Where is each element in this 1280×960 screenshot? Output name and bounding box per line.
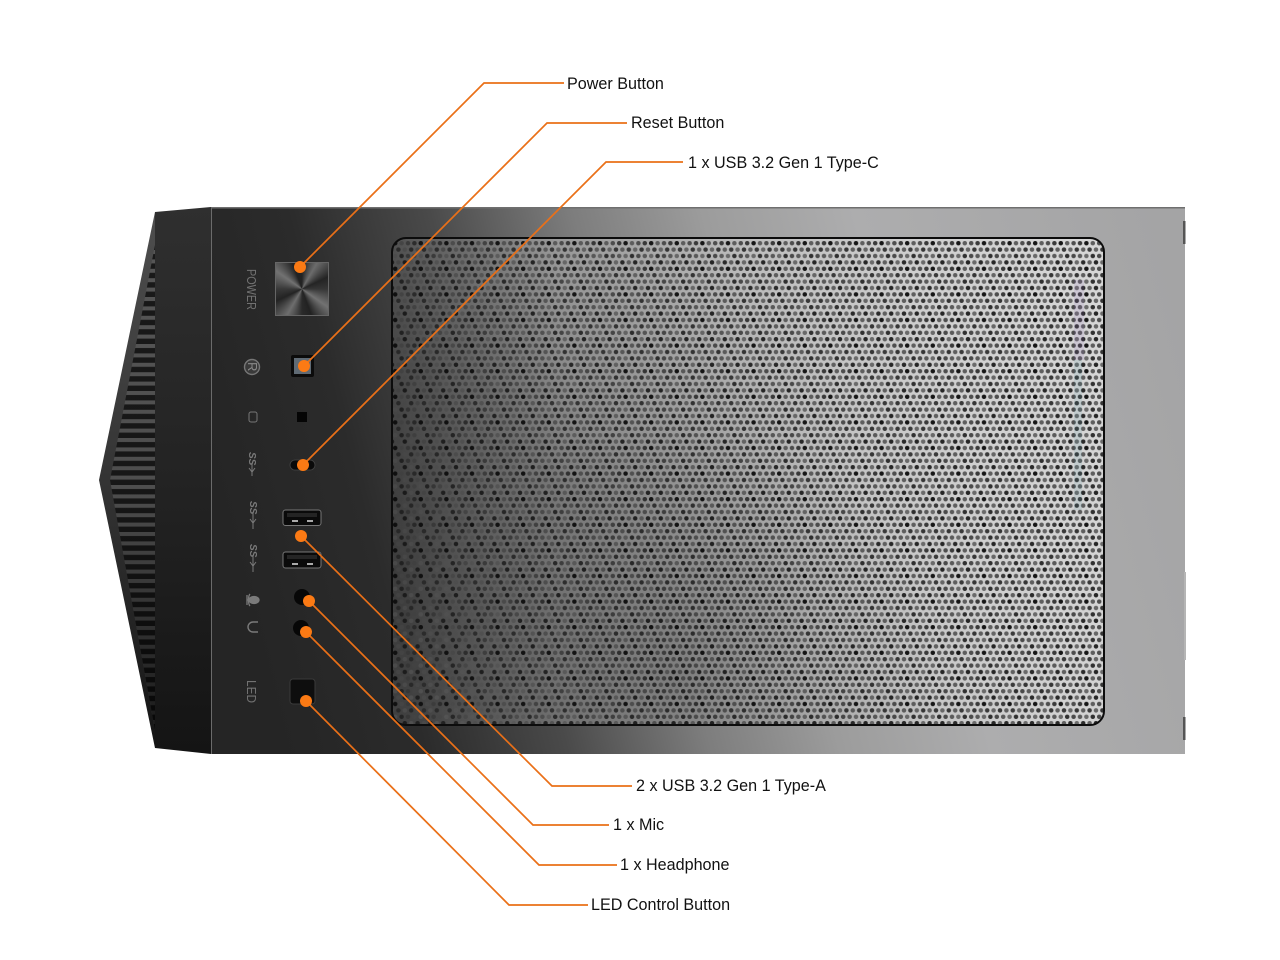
- callout: LED Control Button: LED Control Button: [591, 896, 730, 914]
- callout: Power Button: [294, 75, 664, 273]
- USB-C port: [290, 460, 315, 470]
- icon: USB SS 2: SS: [247, 501, 258, 515]
- icon: USB SS 3: [247, 544, 258, 572]
- callout: Headphone: 1 x Headphone: [620, 856, 730, 874]
- HDD LED: [297, 412, 307, 422]
- callout: LED Control Button: [300, 695, 730, 914]
- left angled front bezel: [99, 207, 211, 754]
- icon: microphone: [247, 594, 259, 606]
- callout: USB Type-C: 1 x USB 3.2 Gen 1 Type-C: [688, 154, 879, 172]
- callout: USB Type-A: [295, 530, 826, 795]
- callout: USB Type-C: [297, 154, 879, 471]
- icon: USB SS 2: [247, 501, 258, 529]
- USB-A port 2: [283, 552, 321, 568]
- PC case front panel: [99, 207, 1186, 754]
- main case panel: [211, 207, 1186, 754]
- panel label: POWER: POWER: [244, 269, 259, 310]
- callout: Power Button: Power Button: [567, 75, 664, 93]
- panel label: LED: LED: [244, 680, 259, 703]
- reset button: [291, 355, 314, 377]
- icon: drive activity: [249, 412, 257, 422]
- RGB glow through mesh: [1074, 280, 1084, 510]
- callout: Reset Button: Reset Button: [631, 114, 724, 132]
- mic jack: [294, 589, 310, 605]
- icon: USB SS 3: SS: [247, 544, 258, 558]
- LED control button: [290, 679, 315, 704]
- callout: Mic: [303, 595, 664, 834]
- icon: reset: [244, 360, 260, 374]
- power button: [275, 262, 329, 316]
- callout: Reset Button: [298, 114, 724, 372]
- callout: USB Type-A: 2 x USB 3.2 Gen 1 Type-A: [636, 777, 826, 795]
- icon: reset: R: [245, 362, 260, 371]
- USB-A port 1: [283, 510, 321, 526]
- headphone jack: [293, 620, 309, 636]
- icon: headphones: [248, 622, 258, 632]
- callout: Headphone: [300, 626, 730, 874]
- icon: USB SS 1: [246, 452, 257, 476]
- icon: USB SS 1: SS: [246, 452, 257, 466]
- callout: Mic: 1 x Mic: [613, 816, 664, 834]
- perforated mesh vent: [392, 238, 1104, 725]
